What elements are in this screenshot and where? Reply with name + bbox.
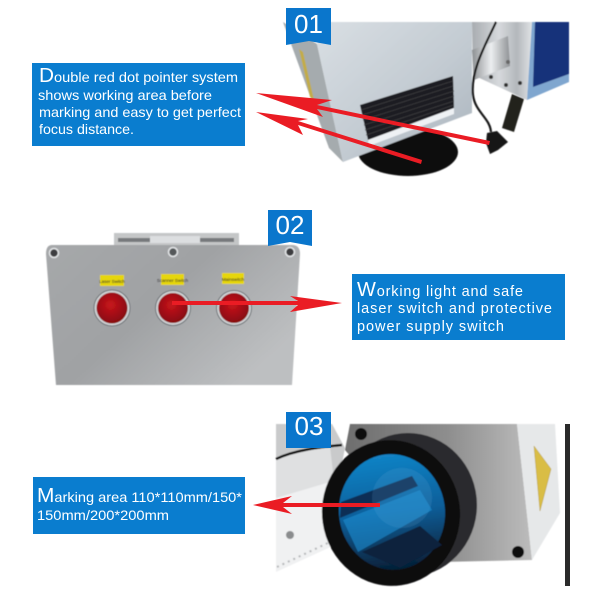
badge: 03 (286, 411, 331, 448)
panel: laser head photo 01 (283, 22, 569, 176)
warning label (299, 49, 314, 100)
callout: marking area: 150mm/200*200mm (37, 507, 169, 523)
yellow labels: Scanner Switch (157, 278, 189, 283)
black vertical bar (565, 424, 570, 586)
callout: marking area (33, 477, 245, 534)
callout: working light: power supply switch (357, 319, 504, 335)
badge: 01 (286, 8, 331, 45)
panel: switch panel photo 02 (46, 233, 300, 385)
callout: working light: laser switch and protective (357, 301, 552, 317)
callout: double red dot: shows working area before (38, 87, 212, 103)
callout: working light: Working light and safe (357, 279, 523, 301)
arrow: pointer beam one (256, 93, 490, 145)
arrow: pointer beam two (256, 112, 422, 164)
callout: double red dot: Double red dot pointer system (39, 65, 238, 87)
badge: 03: 03 (294, 411, 324, 441)
yellow labels: Mainswitch (222, 277, 245, 282)
callout: marking area: Marking area 110*110mm/150* (37, 485, 243, 507)
housing side face (517, 424, 560, 560)
red buttons (94, 290, 252, 326)
connector plug (486, 94, 524, 154)
panel: lens photo 03 (276, 424, 560, 595)
left metal bracket (276, 424, 345, 572)
arrow: lens pointer (253, 496, 380, 514)
glass reflections (340, 468, 442, 568)
blue housing (527, 22, 569, 100)
badge: 02: 02 (276, 210, 304, 240)
badge: 02 (268, 210, 312, 246)
head left face (283, 22, 343, 162)
callout: working light (352, 274, 565, 340)
housing front face (345, 424, 532, 562)
arrow: switch pointer (172, 296, 342, 312)
black base (358, 128, 458, 176)
lens bezel (313, 431, 469, 595)
metal plate (46, 245, 300, 385)
screws (50, 248, 294, 258)
corner screws (355, 428, 524, 558)
lens glass (331, 447, 453, 577)
callout: double red dot (32, 63, 245, 146)
power cable (473, 22, 496, 132)
yellow labels (99, 273, 245, 286)
laser warning triangle (534, 446, 551, 511)
hinge (114, 233, 239, 246)
badge: 01: 01 (294, 9, 323, 39)
callout: double red dot: focus distance. (39, 121, 134, 137)
cylinder (472, 36, 522, 87)
head front face (317, 22, 472, 162)
silver mounting plate (472, 22, 532, 100)
yellow labels: Laser Switch (99, 279, 125, 284)
lens barrel (339, 433, 477, 577)
vent grille (360, 76, 454, 146)
callout: double red dot: marking and easy to get perfect (39, 104, 241, 120)
